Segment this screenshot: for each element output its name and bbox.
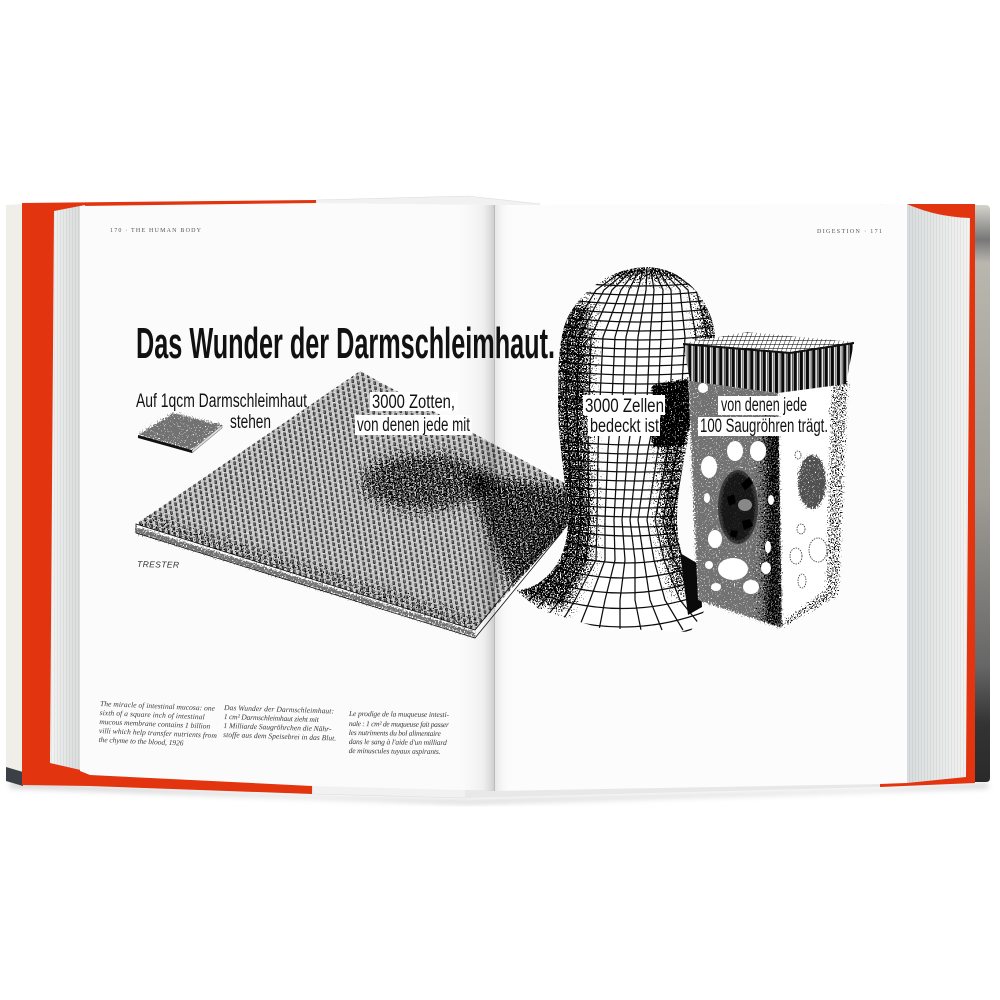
mat shading <box>136 452 590 630</box>
mat surface of villi <box>136 371 592 630</box>
caption: 100 tubes <box>700 395 828 437</box>
title: Das Wunder der Darmschleimhaut. <box>136 319 555 368</box>
caption English: sixth of a square inch of intestinal <box>100 708 205 721</box>
caption English: mucous membrane contains 1 billion <box>99 717 211 731</box>
small square sample icon <box>138 413 222 453</box>
caption: 3000 cells: bedeckt ist <box>590 416 660 437</box>
caption: 100 tubes: 100 Saugröhren trägt. <box>700 416 828 437</box>
caption: 3000 villi: 3000 Zotten, <box>372 392 455 413</box>
mat base stipple <box>136 371 592 630</box>
caption: 3000 villi: von denen jede mit <box>357 415 471 436</box>
caption: on 1 sq cm: Auf 1qcm Darmschleimhaut <box>136 391 308 412</box>
book ground shadow <box>10 782 988 804</box>
book block back right <box>970 205 990 782</box>
caption German: Das Wunder der Darmschleimhaut: <box>223 703 334 715</box>
red cover left <box>22 200 316 794</box>
book block back left <box>6 204 23 786</box>
caption French: de minuscules tuyaux aspirants. <box>349 746 441 756</box>
caption: 3000 cells: 3000 Zellen <box>585 396 664 417</box>
caption English: villi which help transfer nutrients from <box>99 726 218 740</box>
white hardcover spine <box>312 196 540 798</box>
right page <box>495 204 907 791</box>
caption French: nale : 1 cm² de muqueuse fait passer <box>349 719 449 729</box>
villus body <box>515 267 715 632</box>
right page stack <box>907 204 970 783</box>
caption: 3000 cells <box>585 396 664 437</box>
caption German: stoffe aus dem Speisebrei in das Blut. <box>223 730 336 743</box>
villus stipple shading <box>510 260 725 612</box>
caption German <box>222 703 337 743</box>
nucleus <box>718 470 758 544</box>
caption: on 1 sq cm <box>136 391 308 433</box>
right face stipple edge <box>782 380 848 628</box>
caption French: dans le sang à l'aide d'un milliard <box>349 737 447 747</box>
caption French <box>348 709 450 756</box>
caption: 3000 villi <box>357 392 471 436</box>
villus grid <box>524 270 715 632</box>
running head left: 170 · THE HUMAN BODY <box>110 228 202 234</box>
mat side edge <box>136 524 562 638</box>
gutter shadow right <box>495 205 511 791</box>
label background patches <box>355 392 830 436</box>
right face vacuoles <box>790 407 835 588</box>
caption: 100 tubes: von denen jede <box>721 395 807 416</box>
red cover right <box>880 204 975 787</box>
gutter shadow left <box>455 205 495 791</box>
caption French: les nutriments du bol alimentaire <box>349 728 442 738</box>
cell block drawing <box>683 332 854 630</box>
signature: TRESTER <box>137 559 179 570</box>
dark corner stipple <box>764 420 784 630</box>
running head right: DIGESTION · 171 <box>817 229 882 235</box>
shadow next to villus base <box>680 553 702 615</box>
caption French: Le prodige de la muqueuse intesti- <box>348 709 450 719</box>
book spread infographic <box>6 196 990 806</box>
cell body white <box>688 378 782 628</box>
brush top hatch <box>683 332 854 352</box>
caption English: the chyme to the blood, 1926 <box>98 735 184 748</box>
villi mat illustration <box>136 371 592 638</box>
left page stack <box>50 205 85 771</box>
cell vacuoles <box>698 383 774 594</box>
caption German: 1 Milliarde Saugröhrchen die Nähr- <box>223 721 332 733</box>
left face stipple <box>688 378 782 628</box>
white bottom cover right <box>465 783 880 798</box>
villus drawing <box>515 267 715 632</box>
caption English <box>98 699 219 749</box>
suction tube brush <box>683 342 854 393</box>
caption German: 1 cm² Darmschleimhaut zieht mit <box>224 712 320 724</box>
left page <box>80 203 495 791</box>
caption: on 1 sq cm: stehen <box>230 412 271 433</box>
caption English: The miracle of intestinal mucosa: one <box>100 699 216 713</box>
